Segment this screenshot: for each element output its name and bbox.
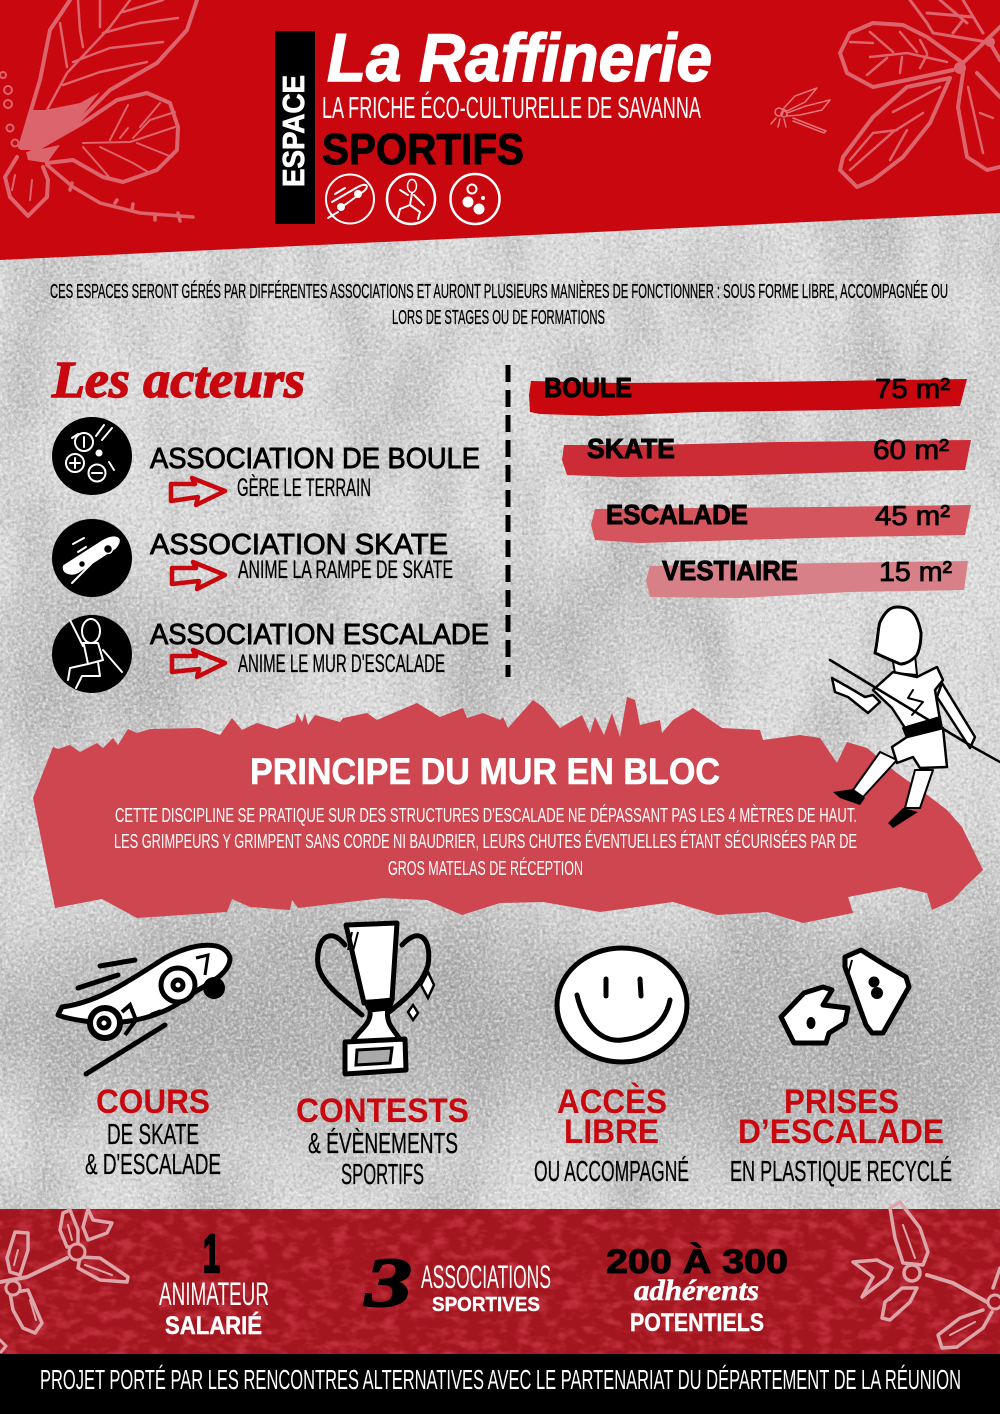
sublabel — [308, 1127, 458, 1191]
climber illustration — [830, 607, 1000, 828]
bar: escalade 45 m² — [591, 499, 971, 543]
name: ASSOCIATION ESCALADE — [150, 619, 489, 651]
bar: vestiaire 15 m²: VESTIAIRE — [662, 555, 798, 586]
icon: skateboard badge — [326, 174, 374, 224]
icon: boules — [52, 417, 132, 495]
bar: boule 75 m²: BOULE — [544, 372, 632, 403]
title: La Raffinerie: La Raffinerie — [327, 20, 712, 96]
sublabel — [85, 1119, 221, 1181]
sublabel: & D'ESCALADE — [85, 1149, 221, 1181]
stat: adherents: adhérents — [634, 1274, 759, 1307]
bar: vestiaire 15 m²: 15 m² — [879, 556, 952, 587]
heading: PRINCIPE DU MUR EN BLOC — [250, 751, 720, 792]
stat: associations: SPORTIVES — [432, 1294, 540, 1316]
intro text: LORS DE STAGES OU DE FORMATIONS — [392, 306, 605, 329]
arrow — [171, 478, 225, 505]
stat: associations — [364, 1245, 551, 1322]
decorative flowers left — [0, 1209, 128, 1352]
red textured band — [0, 1209, 1000, 1354]
icon: climber — [52, 615, 132, 693]
label: ACCÈS — [557, 1083, 667, 1121]
stat: adherents: 200 À 300 — [606, 1243, 788, 1281]
title block — [275, 20, 712, 224]
bar: escalade 45 m²: 45 m² — [875, 500, 950, 531]
header icons — [326, 174, 500, 224]
sublabel: OU ACCOMPAGNÉ — [534, 1155, 689, 1188]
item: contests — [296, 923, 469, 1191]
stat: animateur: SALARIÉ — [165, 1311, 262, 1340]
icon: climber badge — [387, 174, 435, 224]
heading: Sportifs: SPORTIFS — [322, 125, 524, 174]
torn banner — [33, 697, 983, 923]
description — [114, 804, 857, 880]
bar: escalade 45 m²: ESCALADE — [606, 499, 748, 530]
panel: les acteurs — [51, 352, 489, 693]
icon: skateboard — [58, 945, 230, 1074]
dragonfly — [771, 88, 830, 133]
decorative flowers right — [853, 1202, 1000, 1348]
label: CONTESTS — [296, 1092, 469, 1130]
stat: associations: ASSOCIATIONS — [421, 1259, 551, 1295]
intro text — [50, 280, 948, 329]
sublabel: SPORTIFS — [341, 1159, 424, 1191]
item: cours — [58, 945, 230, 1181]
arrow — [172, 650, 225, 677]
description: GROS MATELAS DE RÉCEPTION — [388, 857, 583, 880]
icon: petanque badge — [450, 174, 500, 224]
panel: principe du mur en bloc — [33, 697, 983, 923]
arrow — [172, 562, 225, 589]
item: prises — [730, 950, 952, 1188]
chart: surfaces — [529, 372, 971, 598]
icon: skateboard — [52, 519, 132, 597]
icon: climbing holds — [781, 950, 909, 1043]
label: PRISES — [784, 1083, 899, 1121]
stat: animateur: 1 — [203, 1224, 220, 1284]
label: Espace: ESPACE — [276, 75, 311, 187]
bar: skate 60 m²: SKATE — [587, 433, 675, 464]
label: LIBRE — [564, 1113, 659, 1151]
role: ANIME LE MUR D'ESCALADE — [238, 650, 445, 678]
name: ASSOCIATION DE BOULE — [150, 443, 480, 475]
bar: vestiaire 15 m² — [646, 555, 968, 598]
actor: escalade — [52, 615, 489, 693]
role: ANIME LA RAMPE DE SKATE — [238, 556, 453, 584]
red header band — [0, 0, 1000, 260]
role: GÈRE LE TERRAIN — [237, 473, 371, 502]
stat: adherents — [606, 1243, 788, 1337]
bar: boule 75 m²: 75 m² — [875, 373, 950, 404]
bar: boule 75 m² — [529, 372, 967, 416]
stat: associations: 3 — [364, 1245, 412, 1322]
stat: adherents: POTENTIELS — [630, 1309, 764, 1337]
icon: trophy — [318, 923, 434, 1074]
heading: Les acteurs: Les acteurs — [51, 352, 305, 409]
name: ASSOCIATION SKATE — [150, 529, 448, 561]
bar: skate 60 m² — [562, 433, 971, 477]
actor: boule — [52, 417, 480, 505]
sublabel: DE SKATE — [107, 1119, 199, 1151]
actor: skate — [52, 519, 453, 597]
label — [557, 1083, 667, 1151]
subtitle: LA FRICHE ÉCO-CULTURELLE DE SAVANNA — [322, 90, 701, 125]
decorative plant: right leaves — [840, 0, 1000, 187]
sublabel: & ÉVÈNEMENTS — [308, 1127, 458, 1160]
stat: animateur: ANIMATEUR — [159, 1276, 269, 1312]
decorative plant: left leaves — [0, 0, 197, 221]
item: acces libre — [534, 948, 689, 1188]
stat: animateur — [159, 1224, 269, 1340]
icon: smiley — [557, 948, 687, 1062]
label: D’ESCALADE — [738, 1113, 944, 1151]
panel: key figures — [0, 1202, 1000, 1354]
bar: skate 60 m²: 60 m² — [873, 434, 949, 465]
footer — [0, 1354, 1000, 1414]
label: COURS — [96, 1083, 210, 1121]
black label bar — [275, 31, 315, 224]
label — [738, 1083, 944, 1151]
